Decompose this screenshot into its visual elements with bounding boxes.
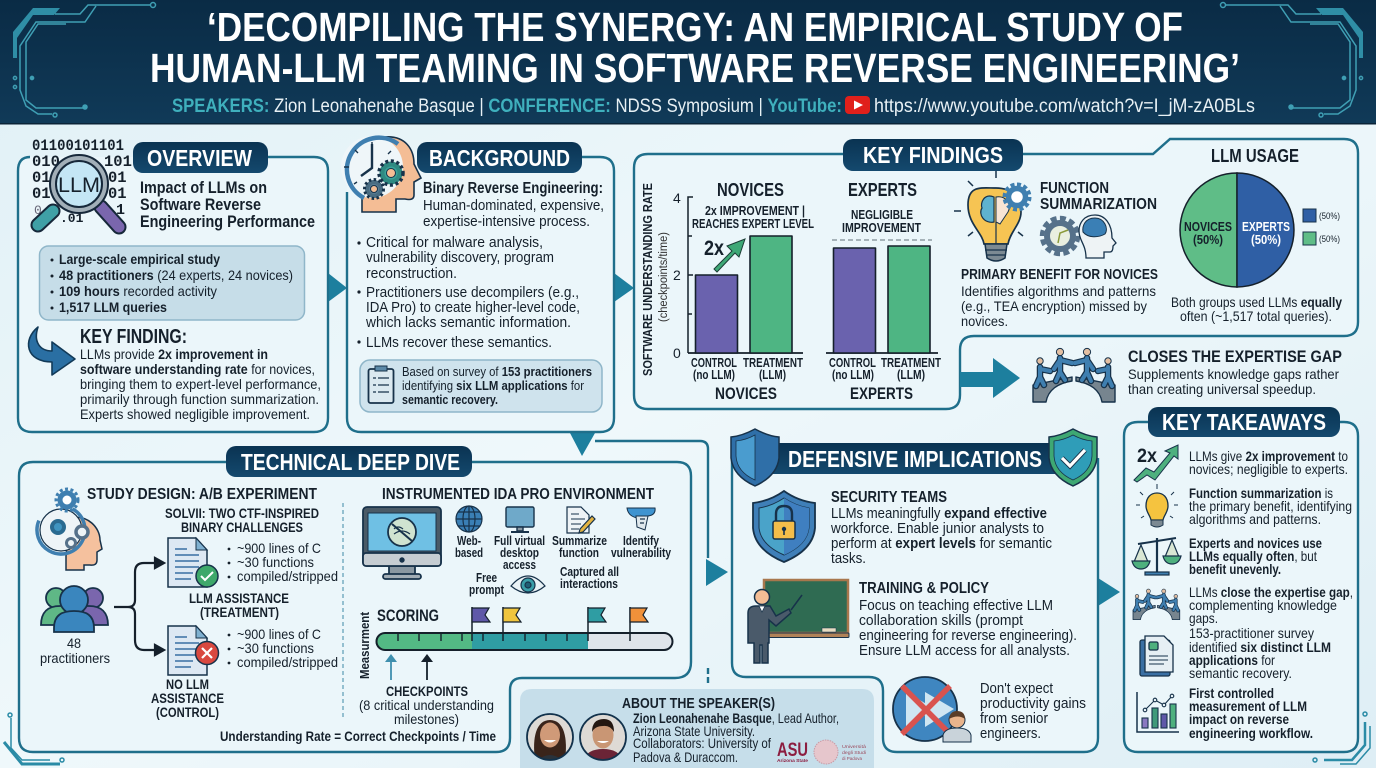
checkpoints text [359, 684, 494, 727]
flags [472, 607, 648, 641]
icon: curved arrow [29, 327, 75, 375]
heading: key findings pill: KEY FINDINGS [863, 142, 1003, 168]
takeaway 2: the primary benefit, identifying [1189, 498, 1352, 514]
environment labels: Captured all [560, 564, 619, 579]
icon: magnifier over binary: 01100101101 [32, 137, 124, 155]
novices labels: REACHES EXPERT LEVEL [692, 217, 814, 231]
solvii heading [165, 506, 319, 535]
stats box: 48 practitioners (24 experts, 24 novices) [59, 267, 293, 283]
icon: magnifier over binary: LLM [58, 174, 100, 197]
panel: technical deep dive [19, 446, 691, 752]
environment labels: interactions [560, 576, 618, 591]
photo: speaker two [580, 714, 626, 760]
logos [777, 740, 867, 764]
panel: about the speakers: ABOUT THE SPEAKER(S) [622, 695, 775, 712]
icon: right shield with check [1049, 429, 1097, 486]
key finding text: Experts showed negligible improvement. [80, 406, 310, 422]
icon: monitor [363, 507, 441, 579]
takeaway 4: complementing knowledge [1189, 597, 1337, 613]
heading: overview pill: OVERVIEW [147, 145, 252, 171]
novices labels [691, 180, 814, 403]
icon: magnifier over binary: 101 [104, 153, 132, 171]
novices labels: (LLM) [759, 368, 786, 382]
training and policy text: TRAINING & POLICY [859, 580, 990, 597]
primary benefit text: novices. [961, 313, 1008, 329]
icon: left shield [731, 429, 779, 486]
novices labels: CONTROL [691, 356, 737, 370]
takeaway 6: First controlled [1189, 685, 1274, 701]
icon: vulnerability [627, 508, 655, 530]
treatment bullets: ~900 lines of C [237, 540, 321, 556]
takeaway 4: LLMs close the expertise gap, [1189, 584, 1353, 600]
takeaway 4 [1133, 584, 1353, 626]
icon: magnifier over binary: 01 [108, 169, 127, 187]
control label [151, 677, 224, 720]
panel: defensive implications [731, 429, 1098, 752]
panel: background [341, 136, 614, 432]
key finding text [80, 326, 321, 422]
bar chart: understanding rate: 0 [673, 345, 681, 361]
security teams text: SECURITY TEAMS [831, 489, 947, 506]
experts labels: NEGLIGIBLE [851, 208, 913, 222]
training and policy text: engineering for reverse engineering). [859, 628, 1077, 644]
bar chart: understanding rate: 4 [673, 190, 681, 206]
experts labels: TREATMENT [881, 356, 941, 370]
icon: globe [456, 506, 482, 532]
training and policy text: collaboration skills (prompt [859, 613, 1023, 629]
takeaway 2 [1136, 484, 1352, 527]
control label: NO LLM [166, 677, 209, 692]
checkpoints text: CHECKPOINTS [386, 684, 468, 699]
takeaway 2: Function summarization is [1189, 485, 1333, 501]
panel: overview [18, 137, 328, 432]
security teams text: workforce. Enable junior analysts to [830, 521, 1044, 537]
icon: documents [1140, 636, 1173, 676]
takeaway 1: LLMs give 2x improvement to [1189, 448, 1348, 464]
panel: key findings [634, 139, 1358, 409]
survey callout: Based on survey of 153 practitioners [402, 364, 592, 379]
takeaway 3 [1132, 535, 1322, 577]
icon: 2x arrow: 2x [1137, 446, 1157, 467]
novices labels: 2x IMPROVEMENT | [705, 204, 805, 218]
training and policy text [859, 580, 1077, 659]
icon: document with check [168, 538, 218, 587]
heading: technical pill: TECHNICAL DEEP DIVE [241, 449, 460, 475]
training and policy text: Focus on teaching effective LLM [859, 598, 1053, 614]
connector arrows [328, 273, 1120, 686]
primary benefit text: PRIMARY BENEFIT FOR NOVICES [961, 266, 1158, 283]
arrows: checkpoints [385, 654, 433, 680]
pie chart: LLM usage [1171, 146, 1342, 324]
productivity text: productivity gains [980, 695, 1086, 712]
environment labels: access [503, 557, 536, 572]
panel: about the speakers [520, 689, 874, 768]
icon: lightbulb with brain and gear [954, 171, 1030, 261]
overview subtitle: Engineering Performance [140, 213, 315, 231]
legend: (50%) [1319, 211, 1340, 222]
icon: head with clock [341, 136, 421, 212]
takeaway 3: LLMs equally often, but [1189, 548, 1317, 564]
background intro [423, 180, 604, 230]
background bullets: Critical for malware analysis, [366, 234, 543, 251]
takeaway 4: gaps. [1189, 610, 1218, 626]
background bullets: Practitioners use decompilers (e.g., [366, 284, 579, 301]
title: ‘DECOMPILING THE SYNERGY: AN EMPIRICAL STUDY OF [207, 4, 1183, 50]
primary benefit text [961, 266, 1158, 329]
takeaway 6: measurement of LLM [1189, 698, 1307, 714]
environment labels: Summarize [552, 533, 607, 548]
scoring bar: Measurment [357, 611, 372, 679]
arrow: to closes gap [960, 358, 1020, 398]
key finding text: primarily through function summarization. [80, 391, 319, 407]
overview subtitle: Impact of LLMs on [140, 179, 267, 197]
icon: gear and head [1042, 215, 1116, 258]
environment labels: based [455, 545, 483, 560]
pie chart: LLM usage: often (~1,517 total queries). [1180, 308, 1332, 324]
practitioners label [40, 635, 110, 666]
icon: bulb [1136, 484, 1178, 527]
icon: magnifier over binary: 1 [116, 202, 125, 219]
icon: magnifier over binary: 01 [32, 185, 51, 203]
stats box: Large-scale empirical study [59, 251, 220, 267]
stats box [40, 246, 304, 320]
environment labels: vulnerability [611, 545, 672, 560]
survey callout [360, 360, 602, 412]
primary benefit text: (e.g., TEA encryption) missed by [961, 298, 1147, 314]
icon: crossed out play with person [893, 677, 971, 742]
header circuit right [1220, 2, 1363, 117]
icon: scales [1132, 538, 1181, 575]
practitioners label: 48 [67, 635, 81, 651]
header circuit left [13, 2, 156, 117]
speaker bio: Padova & Duraccom. [633, 749, 738, 765]
icon: magnifier over binary: 01 [32, 169, 51, 187]
closes the expertise gap text [1128, 347, 1342, 397]
novices labels: TREATMENT [743, 356, 803, 370]
novices labels: NOVICES [717, 180, 784, 200]
takeaway 3: benefit unevenly. [1189, 561, 1281, 577]
overview subtitle [140, 179, 315, 231]
background bullets: IDA Pro) to create higher-level code, [366, 299, 580, 316]
productivity text: from senior [980, 710, 1048, 727]
icon: chart [1137, 692, 1179, 732]
speakers line [172, 96, 1255, 117]
icon: magnifier over binary: 010 [32, 153, 60, 171]
treatment bullets: ~30 functions [237, 554, 314, 570]
logos: Arizona State [777, 758, 809, 763]
treatment label: (TREATMENT) [200, 605, 279, 620]
environment labels: Identify [623, 533, 660, 548]
takeaway 5 [1140, 625, 1331, 681]
header banner [0, 0, 1376, 124]
bar chart: understanding rate: 2 [673, 267, 681, 283]
icon: head with gears [28, 489, 102, 570]
takeaway 3: Experts and novices use [1189, 535, 1322, 551]
icon: magnifier over binary [32, 137, 132, 227]
novices labels: NOVICES [715, 384, 777, 403]
productivity text: Don't expect [980, 680, 1054, 697]
control label: (CONTROL) [156, 705, 219, 720]
takeaway 6: engineering workflow. [1189, 725, 1313, 741]
checkpoints text: milestones) [394, 711, 459, 727]
training and policy text: Ensure LLM access for all analysts. [859, 643, 1070, 659]
control bullets: ~900 lines of C [237, 626, 321, 642]
treatment label [189, 591, 289, 620]
heading: defensive pill: DEFENSIVE IMPLICATIONS [788, 446, 1042, 472]
pie chart: LLM usage: NOVICES [1184, 220, 1232, 234]
scoring bar: SCORING [377, 607, 439, 625]
logos: ASU [777, 740, 808, 761]
speakers line: SPEAKERS: Zion Leonahenahe Basque | CONFERENCE: NDSS Symposium | YouTube: [172, 96, 842, 117]
experts labels: (no LLM) [832, 368, 874, 382]
experts labels [829, 180, 941, 403]
novices labels: (no LLM) [693, 368, 735, 382]
closes the expertise gap text: CLOSES THE EXPERTISE GAP [1128, 347, 1342, 366]
pie chart: LLM usage: LLM USAGE [1211, 146, 1299, 166]
solvii heading: SOLVII: TWO CTF-INSPIRED [165, 506, 319, 521]
background bullets: which lacks semantic information. [365, 314, 571, 331]
environment labels: Free [476, 570, 497, 585]
icon: 2x arrow [1134, 445, 1178, 482]
treatment label: LLM ASSISTANCE [189, 591, 289, 606]
icon: youtube [845, 96, 870, 114]
scoring bar [357, 607, 674, 680]
speaker bio: Collaborators: University of [633, 735, 771, 751]
background bullets [357, 234, 580, 351]
icon: document with x [168, 626, 218, 675]
icon: shield lock [753, 491, 815, 562]
heading: takeaways pill: KEY TAKEAWAYS [1162, 409, 1326, 435]
function summarization heading [1040, 180, 1157, 213]
survey callout: semantic recovery. [402, 392, 498, 407]
background bullets: vulnerability discovery, program [366, 249, 554, 266]
IDA heading: INSTRUMENTED IDA PRO ENVIRONMENT [382, 486, 654, 503]
y axis label: SOFTWARE UNDERSTANDING RATE [640, 183, 655, 376]
security teams text: tasks. [831, 551, 866, 567]
icon: eye [511, 576, 545, 593]
background intro: expertise-intensive process. [423, 213, 590, 230]
background bullets: reconstruction. [366, 265, 457, 282]
takeaway 2: algorithms and patterns. [1189, 511, 1321, 527]
key finding text: KEY FINDING: [80, 326, 187, 348]
primary benefit text: Identifies algorithms and patterns [961, 283, 1156, 299]
icon: magnifier over binary: 0 [34, 203, 42, 218]
environment labels: Full virtual [494, 533, 545, 548]
logos: di Padova [842, 756, 862, 761]
takeaway 5: semantic recovery. [1189, 665, 1292, 681]
icon: bridge with people [1033, 348, 1115, 402]
overview subtitle: Software Reverse [140, 196, 261, 214]
pie chart: LLM usage: EXPERTS [1242, 220, 1290, 234]
study design heading: STUDY DESIGN: A/B EXPERIMENT [87, 486, 317, 503]
security teams text: perform at expert levels for semantic [831, 536, 1052, 552]
background intro: Binary Reverse Engineering: [423, 180, 603, 197]
stats box: 1,517 LLM queries [59, 299, 167, 315]
speaker bio: Zion Leonahenahe Basque, Lead Author, [633, 710, 839, 726]
treatment bullets: compiled/stripped [237, 568, 338, 584]
y axis label [640, 183, 670, 376]
background bullets: LLMs recover these semantics. [366, 334, 552, 351]
corner circuits [4, 712, 1370, 764]
icon: small desktop [506, 507, 534, 532]
practitioners label: practitioners [40, 650, 110, 666]
control bullets [228, 626, 338, 670]
function summarization heading: FUNCTION [1040, 180, 1109, 197]
speaker bio: Arizona State University. [633, 723, 755, 739]
y axis label: (checkpoints/time) [658, 232, 670, 322]
checkpoints text: (8 critical understanding [359, 697, 494, 713]
security teams text [830, 489, 1052, 567]
survey callout: identifying six LLM applications for [402, 378, 585, 393]
pie chart: LLM usage: Both groups used LLMs equally [1171, 294, 1342, 310]
icon: three people [41, 586, 108, 632]
legend [1303, 209, 1340, 245]
environment labels: desktop [500, 545, 539, 560]
stats box: 109 hours recorded activity [59, 283, 217, 299]
closes the expertise gap text: Supplements knowledge gaps rather [1128, 366, 1339, 382]
control label: ASSISTANCE [151, 691, 224, 706]
icon: small bridge [1133, 589, 1180, 620]
icon: clipboard [368, 366, 394, 403]
key finding text: software understanding rate for novices, [80, 361, 315, 377]
takeaway 1 [1134, 445, 1348, 482]
pie chart: LLM usage: (50%) [1193, 233, 1223, 247]
takeaway 5: 153-practitioner survey [1189, 625, 1314, 641]
security teams text: LLMs meaningfully expand effective [831, 506, 1047, 522]
productivity text [980, 680, 1086, 742]
environment labels: Web- [457, 533, 481, 548]
productivity text: engineers. [980, 725, 1041, 742]
panel: key takeaways [1124, 407, 1358, 752]
icon: teacher at blackboard [748, 580, 849, 663]
icon: magnifier over binary: 01 [108, 185, 127, 203]
title [150, 4, 1240, 91]
takeaway 5: identified six distinct LLM [1189, 639, 1331, 655]
experts labels: EXPERTS [848, 180, 917, 200]
experts labels: IMPROVEMENT [842, 221, 921, 235]
background intro: Human-dominated, expensive, [423, 197, 604, 214]
logos: degli Studi [842, 750, 866, 755]
function summarization heading: SUMMARIZATION [1040, 196, 1157, 213]
formula: Understanding Rate = Correct Checkpoints / Time [220, 729, 496, 744]
control bullets: compiled/stripped [237, 654, 338, 670]
treatment bullets [228, 540, 338, 584]
environment labels [455, 533, 672, 597]
control bullets: ~30 functions [237, 640, 314, 656]
experts labels: EXPERTS [850, 384, 913, 403]
environment labels: prompt [469, 582, 505, 597]
novices labels: 2x [704, 237, 724, 260]
photo: speaker one [527, 714, 573, 760]
arrow: 2x [714, 239, 745, 272]
takeaway 6: impact on reverse [1189, 711, 1289, 727]
legend: (50%) [1319, 234, 1340, 245]
environment labels: function [559, 545, 599, 560]
icon: magnifier over binary: .01 [60, 211, 84, 226]
closes the expertise gap text: than creating universal speedup. [1128, 381, 1316, 397]
solvii heading: BINARY CHALLENGES [181, 520, 303, 535]
key finding text: LLMs provide 2x improvement in [80, 346, 268, 362]
takeaway 6 [1137, 685, 1313, 741]
takeaway 5: applications for [1189, 652, 1275, 668]
arrows: split to conditions [114, 558, 164, 655]
pie chart: LLM usage: (50%) [1251, 233, 1281, 247]
speakers line: https://www.youtube.com/watch?v=I_jM-zA0BLs [874, 96, 1255, 117]
takeaway 1: novices; negligible to experts. [1189, 461, 1348, 477]
experts labels: (LLM) [897, 368, 925, 382]
heading: background pill: BACKGROUND [429, 145, 570, 171]
key finding text: bringing them to expert-level performance, [80, 376, 321, 392]
heading: defensive pill [742, 443, 1062, 474]
experts labels: CONTROL [829, 356, 876, 370]
bar chart: understanding rate [640, 180, 941, 403]
logos: Università [842, 744, 867, 749]
icon: document with pencil [567, 507, 595, 533]
speaker bio [633, 710, 839, 765]
